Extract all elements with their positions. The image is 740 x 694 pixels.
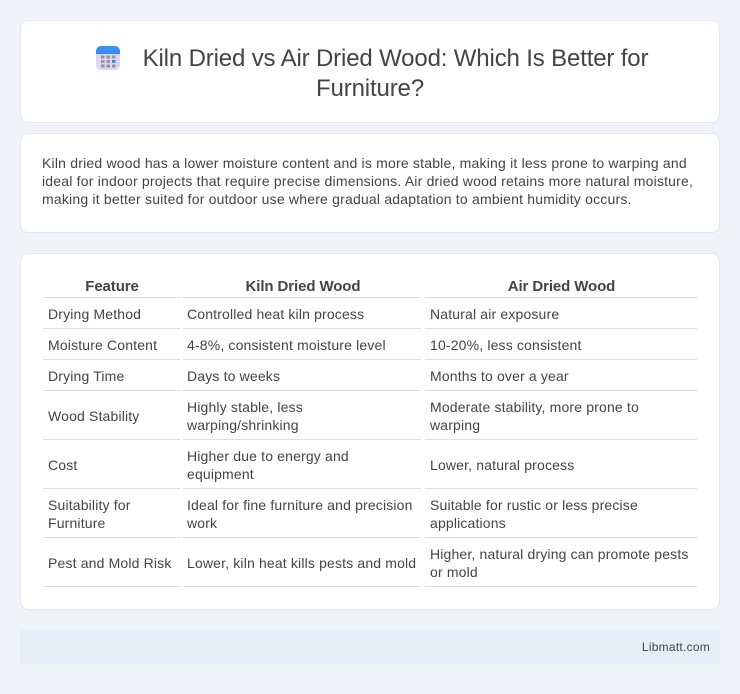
panel: comparison table card: Higher, natural drying can promote pests bbox=[430, 546, 689, 562]
panel: comparison table card: applications bbox=[430, 515, 506, 531]
panel: summary text card bbox=[20, 133, 720, 233]
row: Drying Method: Drying Method bbox=[48, 306, 141, 322]
column header: Feature: Feature bbox=[85, 278, 139, 295]
footer bar bbox=[20, 630, 720, 664]
panel: comparison table card: warping bbox=[430, 417, 480, 433]
panel: comparison table card: Suitable for rustic or less precise bbox=[430, 497, 638, 513]
panel: comparison table card: 4-8%, consistent moisture level bbox=[187, 337, 386, 353]
summary paragraph: ideal for indoor projects that require precise dimensions. Air dried wood retains more natural moisture, bbox=[42, 173, 693, 189]
row: Suitability for Furniture: Furniture bbox=[48, 515, 105, 531]
title bbox=[143, 45, 648, 102]
column header: Kiln Dried Wood: Kiln Dried Wood bbox=[246, 278, 360, 295]
summary paragraph: making it better suited for outdoor use where gradual adaptation to ambient humidity occurs. bbox=[42, 191, 632, 207]
panel: comparison table card: equipment bbox=[187, 466, 254, 482]
panel: comparison table card: 10-20%, less consistent bbox=[430, 337, 582, 353]
summary paragraph: Kiln dried wood has a lower moisture content and is more stable, making it less prone to warping and bbox=[42, 155, 687, 171]
panel: comparison table card: Ideal for fine furniture and precision bbox=[187, 497, 413, 513]
panel: comparison table card: Days to weeks bbox=[187, 368, 280, 384]
row: Pest and Mold Risk: Pest and Mold Risk bbox=[48, 555, 172, 571]
panel: comparison table card: Controlled heat kiln process bbox=[187, 306, 364, 322]
row: Moisture Content: Moisture Content bbox=[48, 337, 157, 353]
panel: comparison table card: Moderate stability, more prone to bbox=[430, 399, 639, 415]
panel: comparison table card: Months to over a year bbox=[430, 368, 569, 384]
panel: comparison table card bbox=[20, 253, 720, 610]
column header: Air Dried Wood: Air Dried Wood bbox=[508, 278, 615, 295]
row: Drying Time: Drying Time bbox=[48, 368, 124, 384]
icon: calendar bbox=[96, 46, 120, 70]
panel: comparison table card: Higher due to energy and bbox=[187, 448, 349, 464]
row: Suitability for Furniture: Suitability for bbox=[48, 497, 131, 513]
title: Furniture? bbox=[316, 75, 424, 102]
panel: comparison table card: or mold bbox=[430, 564, 478, 580]
row: Wood Stability: Wood Stability bbox=[48, 408, 139, 424]
panel: comparison table card: Lower, natural process bbox=[430, 457, 574, 473]
footer text: Libmatt.com bbox=[642, 640, 710, 654]
panel: title card bbox=[20, 20, 720, 123]
panel: comparison table card: Lower, kiln heat kills pests and mold bbox=[187, 555, 416, 571]
summary paragraph bbox=[42, 155, 693, 207]
row: Cost: Cost bbox=[48, 457, 77, 473]
title: Kiln Dried vs Air Dried Wood: Which Is Better for bbox=[143, 45, 648, 72]
panel: comparison table card: warping/shrinking bbox=[187, 417, 299, 433]
panel: comparison table card: Natural air exposure bbox=[430, 306, 559, 322]
panel: comparison table card: work bbox=[187, 515, 217, 531]
panel: comparison table card: Highly stable, less bbox=[187, 399, 303, 415]
row: Suitability for Furniture bbox=[48, 497, 131, 531]
